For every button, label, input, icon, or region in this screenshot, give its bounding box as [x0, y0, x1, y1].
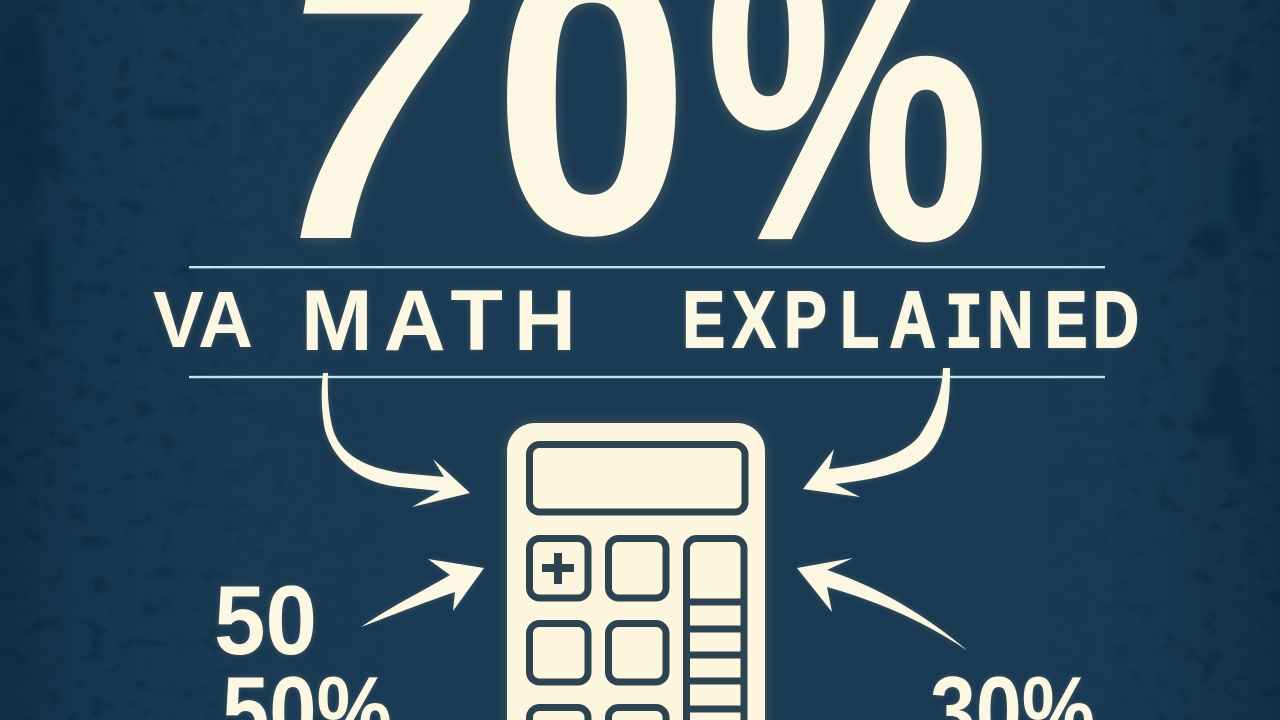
subtitle: VA MATH EXPLAINED: A [890, 275, 936, 365]
calculator icon [507, 423, 765, 720]
subtitle: VA MATH EXPLAINED: D [1093, 275, 1139, 365]
subtitle: VA MATH EXPLAINED: I [945, 281, 983, 371]
subtitle: VA MATH EXPLAINED: E [1045, 275, 1087, 365]
subtitle: VA MATH EXPLAINED: N [987, 275, 1033, 365]
headline: 70% [236, 0, 989, 328]
subtitle: VA MATH EXPLAINED: L [840, 275, 879, 365]
arrow: from Explained to calculator [803, 368, 950, 497]
subtitle: VA MATH EXPLAINED: X [733, 275, 775, 365]
bottom divider line [189, 376, 1105, 378]
subtitle: VA MATH EXPLAINED: VA [153, 275, 253, 364]
arrow: 50% pointing to calculator [361, 559, 484, 627]
subtitle: VA MATH EXPLAINED: MATH [301, 273, 576, 369]
side key dividers [686, 602, 744, 709]
subtitle: VA MATH EXPLAINED [153, 273, 1139, 371]
label: 50: 50 [214, 565, 317, 675]
arrow: 30% pointing to calculator [797, 558, 968, 651]
top divider line [189, 266, 1105, 268]
subtitle: VA MATH EXPLAINED: E [682, 275, 725, 365]
calculator body [507, 423, 765, 720]
arrow: from VA Math to calculator [322, 373, 470, 507]
plus key symbol [542, 553, 574, 584]
calculator screen [530, 444, 745, 512]
subtitle: VA MATH EXPLAINED: P [784, 275, 827, 365]
calculator buttons [530, 538, 744, 720]
